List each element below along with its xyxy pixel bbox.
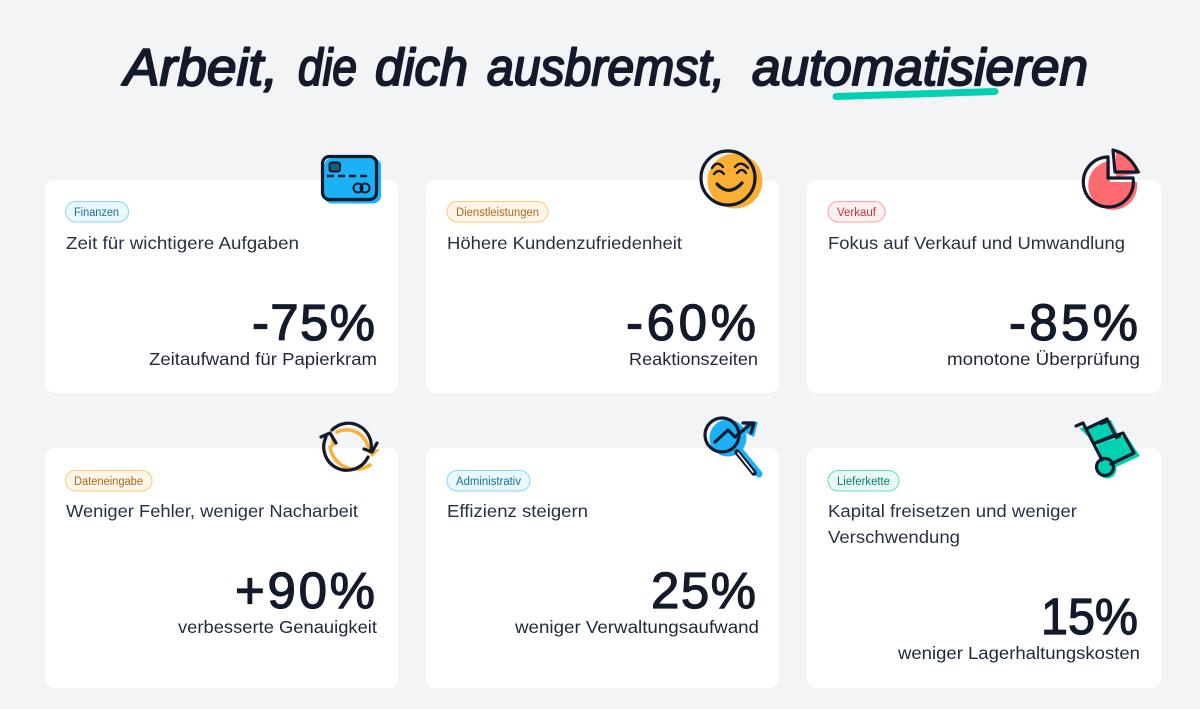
badge: Lieferkette: Lieferkette (837, 476, 890, 488)
heading: Fokus auf Verkauf und Umwandlung (828, 233, 1125, 253)
caption: weniger Lagerhaltungskosten (897, 643, 1140, 663)
caption: verbesserte Genauigkeit (178, 617, 377, 637)
title: automatisieren (752, 39, 1088, 97)
badge: Finanzen: Finanzen (74, 207, 119, 219)
number: -60% (626, 294, 756, 351)
number: -75% (252, 294, 375, 351)
number: 15% (1041, 588, 1138, 645)
icon: refresh arrows (321, 423, 380, 470)
title (121, 39, 1088, 97)
icon: smiley (701, 151, 762, 208)
icon: credit card (322, 156, 381, 204)
heading: Kapital freisetzen und weniger (828, 501, 1077, 521)
icon: pie chart (1083, 150, 1141, 210)
caption: weniger Verwaltungsaufwand (514, 617, 759, 637)
panel: Lieferkette (807, 419, 1161, 688)
number: +90% (235, 562, 375, 619)
panel: Dateneingabe (45, 423, 398, 688)
heading: Weniger Fehler, weniger Nacharbeit (66, 501, 358, 521)
icon: hand truck with boxes (1076, 419, 1140, 478)
heading: Zeit für wichtigere Aufgaben (66, 233, 299, 253)
badge: Administrativ (447, 470, 530, 491)
panel: Finanzen (45, 156, 398, 393)
heading: Höhere Kundenzufriedenheit (447, 233, 682, 253)
badge: Administrativ: Administrativ (456, 476, 521, 488)
title: die (298, 39, 357, 97)
title: Arbeit, (121, 39, 278, 97)
heading: Effizienz steigern (447, 501, 588, 521)
caption: Zeitaufwand für Papierkram (149, 349, 377, 369)
badge: Dateneingabe (66, 470, 152, 491)
badge: Dienstleistungen (447, 202, 548, 222)
number: 25% (651, 562, 756, 619)
badge: Dienstleistungen: Dienstleistungen (456, 207, 539, 219)
title: dich (375, 39, 468, 97)
panel: Administrativ (426, 418, 779, 688)
number: -85% (1009, 294, 1138, 351)
badge: Verkauf (828, 202, 885, 222)
badge: Dateneingabe: Dateneingabe (74, 476, 143, 488)
panel: Dienstleistungen (426, 151, 779, 393)
caption: Reaktionszeiten (629, 349, 758, 369)
icon: magnifier with trend arrow (705, 418, 759, 474)
caption: monotone Überprüfung (947, 349, 1140, 369)
badge: Verkauf: Verkauf (837, 207, 877, 219)
heading line 2: Verschwendung (828, 527, 960, 547)
badge: Finanzen (66, 202, 128, 222)
title: ausbremst, (487, 39, 725, 97)
panel: Verkauf (807, 150, 1161, 393)
badge: Lieferkette (828, 470, 899, 491)
